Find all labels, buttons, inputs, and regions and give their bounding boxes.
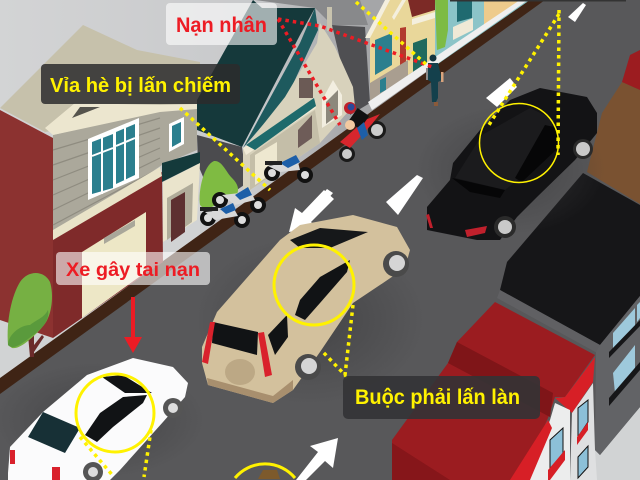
SUV small side window bbox=[268, 315, 288, 355]
grey siding wall bbox=[53, 105, 197, 238]
lower door bbox=[298, 115, 312, 148]
garage bbox=[255, 142, 277, 185]
bush bbox=[200, 161, 238, 210]
house: beige background building bbox=[0, 25, 200, 132]
garage door bbox=[82, 212, 146, 318]
dotted leader: pavement bbox=[180, 108, 270, 190]
houses: colourful row in the distance bbox=[368, 0, 530, 110]
pavement curb bbox=[0, 0, 545, 394]
right grey side bbox=[332, 25, 370, 115]
white sedan tail lights bbox=[10, 450, 15, 464]
dotted leaders: black car bbox=[487, 10, 559, 155]
motorbike 1 bbox=[264, 155, 313, 183]
SUV spare wheel cover bbox=[225, 359, 255, 385]
label: Vỉa hè bị lấn chiếm: Vỉa hè bị lấn chiếm bbox=[50, 75, 231, 97]
house: yellow gabled house bbox=[365, 0, 435, 102]
SUV wheels bbox=[383, 251, 409, 277]
bright red eave bbox=[510, 420, 552, 480]
dotted leaders: white car bbox=[80, 430, 151, 477]
lower left pavement bbox=[0, 200, 200, 385]
upper shutter bbox=[299, 78, 313, 98]
lower right ground bbox=[570, 407, 640, 480]
building: brown roof with red chimney bbox=[587, 50, 640, 204]
white sidewalk strip bbox=[368, 0, 528, 110]
large window bbox=[88, 118, 139, 200]
SUV rear window bbox=[212, 322, 258, 355]
highlight circle: black car bbox=[480, 104, 558, 182]
tree bbox=[8, 273, 52, 357]
motorbikes parked on pavement bbox=[200, 155, 313, 228]
cream roof fascia bbox=[45, 103, 197, 135]
label: Vỉa hè bị lấn chiếm bbox=[41, 64, 240, 104]
car: beige SUV bbox=[195, 215, 425, 405]
arched window bbox=[322, 80, 342, 128]
cream facade bbox=[243, 23, 355, 195]
black sedan tail lights bbox=[426, 214, 433, 228]
dark roof bbox=[197, 0, 315, 147]
small window bbox=[169, 117, 184, 152]
white front wall bbox=[527, 403, 570, 480]
white side wall bbox=[570, 383, 597, 480]
black sedan wheels bbox=[573, 139, 593, 159]
road lane dashes bbox=[320, 3, 586, 215]
white sedan wheels bbox=[83, 398, 183, 480]
motorcycle with rider bbox=[339, 102, 386, 162]
grey wall windows bbox=[613, 308, 635, 350]
facade windows bbox=[578, 400, 588, 437]
dotted leader: top houses bbox=[356, 2, 428, 66]
building: red roof with white facade bbox=[392, 302, 597, 480]
arrow: pointing at white car bbox=[124, 297, 142, 353]
dotted leaders: victim bbox=[278, 19, 435, 125]
motorbike 2 bbox=[212, 187, 266, 213]
SUV big side window bbox=[295, 260, 350, 320]
house: teal gabled house bbox=[197, 0, 370, 195]
car: white sedan bbox=[0, 358, 205, 480]
car: black sedan bbox=[415, 88, 605, 240]
highlight circle: beige SUV bbox=[274, 245, 354, 325]
label: Buộc phải lấn làn: Buộc phải lấn làn bbox=[355, 386, 520, 409]
top dark gap behind gabled house bbox=[255, 0, 368, 25]
road direction arrow: forward lane bbox=[296, 438, 338, 480]
porch roof bbox=[246, 98, 316, 150]
house: small door block bbox=[162, 135, 247, 242]
label: Buộc phải lấn làn bbox=[343, 376, 540, 419]
highlight circle: white car bbox=[76, 374, 154, 452]
dotted leaders: beige SUV bbox=[322, 305, 353, 375]
road direction arrow: oncoming lane bbox=[289, 190, 334, 232]
top label bar bbox=[450, 0, 626, 2]
lighter roof bbox=[243, 8, 318, 148]
house: grey siding and red lower floor bbox=[45, 103, 197, 338]
label: Nạn nhân: Nạn nhân bbox=[176, 14, 267, 37]
house: red side wall bbox=[0, 110, 53, 338]
white sedan rear window bbox=[28, 412, 80, 453]
building: black roof with grey walls bbox=[497, 173, 640, 455]
pedestrian victim bbox=[426, 54, 444, 106]
highlight circle: bottom vehicle bbox=[235, 464, 295, 479]
label: Xe gây tai nạn: Xe gây tai nạn bbox=[66, 260, 200, 281]
chimney bbox=[327, 7, 332, 31]
label: Xe gây tai nạn bbox=[56, 252, 210, 285]
label: Nạn nhân bbox=[166, 3, 277, 45]
SUV tail lights bbox=[202, 322, 215, 364]
red lower floor bbox=[53, 172, 163, 338]
motorbike 3 bbox=[200, 203, 250, 228]
